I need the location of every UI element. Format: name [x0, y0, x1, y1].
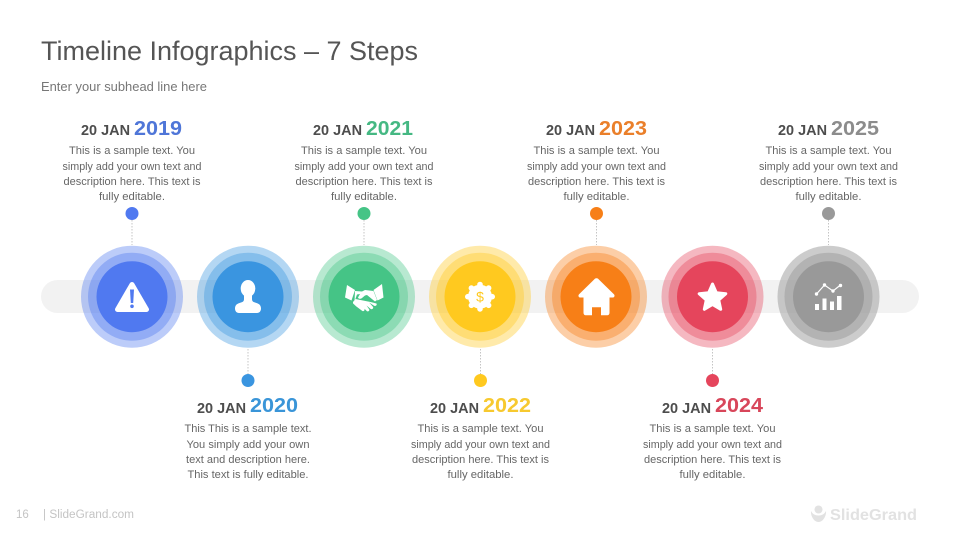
- icon: warning triangle: [118, 284, 146, 310]
- description 2024: simply add your own text and: [643, 439, 782, 451]
- heading 2021: 2021: [366, 117, 413, 140]
- heading 2023: 2023: [599, 117, 647, 140]
- footer site name: | SlideGrand.com: [43, 509, 134, 521]
- heading 2021: [313, 117, 413, 140]
- description 2020: text and description here.: [186, 454, 310, 466]
- description 2021: description here. This text is: [296, 176, 433, 188]
- heading 2025: [778, 117, 879, 140]
- connector dot 2023: [590, 207, 603, 245]
- circle badge 2021: [313, 246, 415, 348]
- description 2025: description here. This text is: [760, 176, 897, 188]
- connector dot 2022: [474, 349, 487, 387]
- icon: house: [578, 278, 615, 315]
- heading 2024: 20 JAN: [662, 400, 711, 417]
- description 2022: This is a sample text. You: [418, 423, 544, 435]
- connector dot 2019: [126, 207, 138, 245]
- connector dot 2020: [242, 349, 254, 387]
- circle badge 2019: [81, 246, 183, 348]
- step 2024: [643, 246, 782, 481]
- title: Timeline Infographics – 7 Steps: [41, 36, 418, 66]
- heading 2020: 20 JAN: [197, 400, 246, 417]
- description 2021: [294, 145, 434, 203]
- description 2023: This is a sample text. You: [534, 145, 660, 157]
- heading 2022: 2022: [483, 394, 531, 417]
- description 2021: simply add your own text and: [294, 161, 434, 173]
- description 2022: simply add your own text and: [411, 439, 550, 451]
- description 2023: fully editable.: [564, 191, 630, 203]
- description 2025: fully editable.: [796, 191, 862, 203]
- heading 2024: 2024: [715, 394, 764, 417]
- description 2020: This This is a sample text.: [184, 423, 312, 435]
- heading 2022: [430, 394, 531, 417]
- description 2019: fully editable.: [99, 191, 165, 203]
- logo wordmark: SlideGrand: [830, 507, 917, 524]
- step 2023: [527, 117, 666, 348]
- heading 2019: [81, 117, 182, 140]
- heading 2022: 20 JAN: [430, 400, 479, 417]
- description 2022: [411, 423, 550, 481]
- step 2019: [62, 117, 202, 348]
- circle badge 2023: [545, 246, 647, 348]
- step 2020: [184, 246, 312, 481]
- description 2019: [62, 145, 202, 203]
- heading 2020: [197, 394, 298, 417]
- circle badge 2022: [429, 246, 531, 348]
- icon: chart: [815, 283, 842, 310]
- description 2025: This is a sample text. You: [766, 145, 892, 157]
- description 2024: This is a sample text. You: [650, 423, 776, 435]
- step 2022: [411, 246, 550, 481]
- heading 2024: [662, 394, 764, 417]
- description 2024: [643, 423, 782, 481]
- connector dot 2025: [822, 207, 835, 245]
- description 2022: description here. This text is: [412, 454, 549, 466]
- icon: person: [235, 280, 261, 313]
- heading 2023: [546, 117, 647, 140]
- icon: handshake: [345, 284, 384, 311]
- description 2019: description here. This text is: [64, 176, 201, 188]
- heading 2019: 2019: [134, 117, 182, 140]
- description 2023: [527, 145, 666, 203]
- connector dot 2021: [358, 207, 370, 245]
- icon: logo mark: [811, 506, 826, 522]
- heading 2021: 20 JAN: [313, 122, 362, 139]
- step 2025: [759, 117, 898, 348]
- description 2019: simply add your own text and: [62, 161, 202, 173]
- heading 2023: 20 JAN: [546, 122, 595, 139]
- heading 2025: 20 JAN: [778, 122, 827, 139]
- description 2024: description here. This text is: [644, 454, 781, 466]
- description 2022: fully editable.: [448, 469, 514, 481]
- description 2024: fully editable.: [680, 469, 746, 481]
- connector dot 2024: [706, 349, 719, 387]
- description 2023: simply add your own text and: [527, 161, 666, 173]
- subhead: Enter your subhead line here: [41, 80, 207, 94]
- step 2021: [294, 117, 434, 348]
- description 2020: You simply add your own: [186, 439, 310, 451]
- icon: gear with dollar: $: [476, 289, 484, 305]
- footer logo: [811, 506, 917, 524]
- circle badge 2024: [662, 246, 764, 348]
- heading 2019: 20 JAN: [81, 122, 130, 139]
- description 2020: This text is fully editable.: [188, 469, 308, 481]
- description 2019: This is a sample text. You: [69, 145, 195, 157]
- timeline track: [41, 280, 919, 313]
- circle badge 2020: [197, 246, 299, 348]
- description 2020: [184, 423, 312, 481]
- heading 2025: 2025: [831, 117, 879, 140]
- footer page number: 16: [16, 509, 29, 521]
- description 2021: fully editable.: [331, 191, 397, 203]
- description 2021: This is a sample text. You: [301, 145, 427, 157]
- description 2025: simply add your own text and: [759, 161, 898, 173]
- icon: star: [699, 284, 726, 309]
- description 2023: description here. This text is: [528, 176, 665, 188]
- heading 2020: 2020: [250, 394, 298, 417]
- circle badge 2025: [778, 246, 880, 348]
- description 2025: [759, 145, 898, 203]
